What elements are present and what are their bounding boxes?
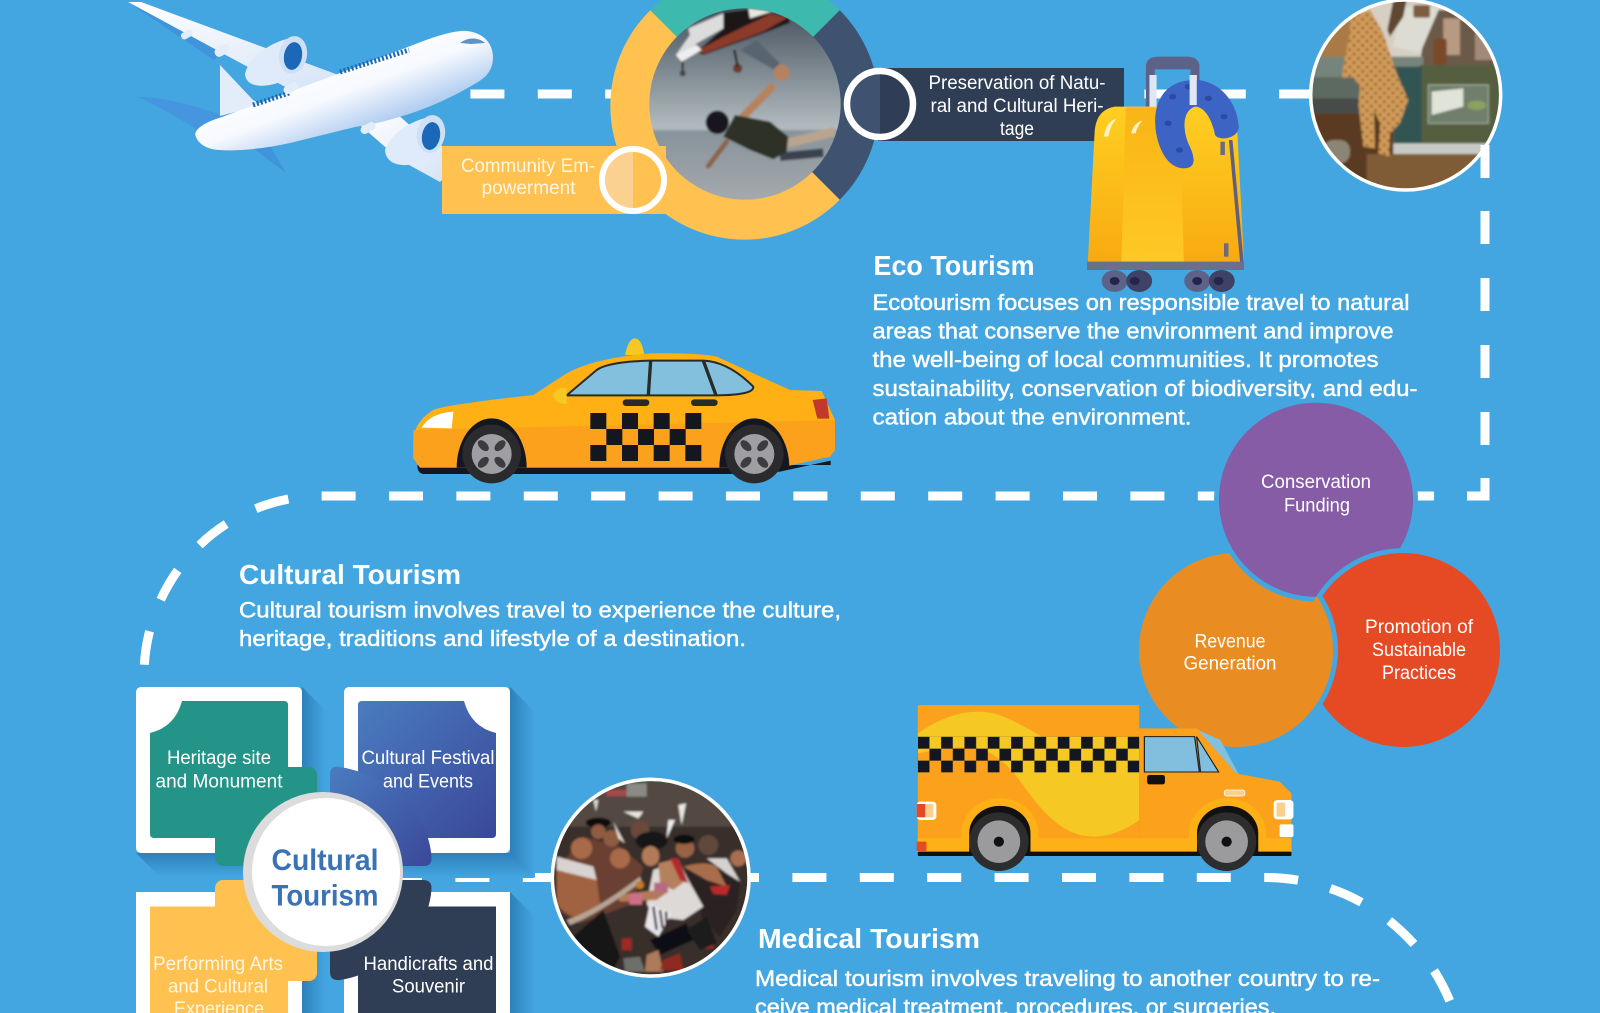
circle: promotion of sustainable practices bbox=[1306, 553, 1500, 747]
center circle: cultural tourism bbox=[243, 792, 403, 952]
heading: eco tourism: Eco Tourism bbox=[874, 250, 1034, 281]
photo: leopard on safari vehicle bbox=[1309, 0, 1503, 194]
heading: cultural tourism: Cultural Tourism bbox=[239, 559, 461, 590]
labels: benefits: Sustainable bbox=[1372, 640, 1466, 661]
callout: preservation of heritage: tage bbox=[1000, 119, 1034, 140]
card: heritage site and monument bbox=[136, 687, 317, 866]
text block: eco tourism description bbox=[872, 290, 1418, 429]
photo: skydiver under a plane bbox=[647, 7, 843, 203]
dashed route: right vertical segment bbox=[1467, 145, 1490, 500]
labels: benefits: Promotion of bbox=[1365, 617, 1474, 638]
text block: cultural tourism description: heritage, traditions and lifestyle of a destination. bbox=[239, 626, 746, 651]
dashed route: lower segment with right curve bbox=[388, 878, 1454, 1013]
text block: eco tourism description: sustainability, conservation of biodiversity, and edu- bbox=[872, 376, 1418, 401]
icon: taxi car bbox=[413, 338, 835, 483]
icon: airplane bbox=[128, 2, 493, 182]
card: performing arts and cultural experience bbox=[136, 880, 317, 1013]
dashed route: top segment bbox=[403, 90, 1310, 98]
card: cultural festival and events: Cultural Festival bbox=[362, 748, 494, 769]
circle: conservation funding bbox=[1219, 403, 1413, 597]
card: handicrafts and souvenir: Souvenir bbox=[392, 976, 466, 998]
donut segment: yellow bbox=[610, 10, 840, 240]
center circle: cultural tourism: Cultural bbox=[272, 844, 378, 877]
text block: eco tourism description: Ecotourism focuses on responsible travel to natural bbox=[872, 290, 1410, 315]
callout: preservation of heritage: Preservation of Natu- bbox=[928, 73, 1106, 94]
text block: eco tourism description: areas that conserve the environment and improve bbox=[872, 319, 1394, 344]
card: performing arts and cultural experience: and Cultural bbox=[168, 976, 268, 998]
icon: suitcase with neck pillow bbox=[1087, 57, 1244, 292]
center circle: cultural tourism: Tourism bbox=[272, 880, 378, 912]
text block: eco tourism description: cation about the environment. bbox=[872, 404, 1192, 429]
dashed route: middle segment with left curve bbox=[144, 496, 1434, 676]
labels: benefits: Generation bbox=[1184, 654, 1276, 674]
text block: medical tourism description: Medical tourism involves traveling to another country to re- bbox=[755, 966, 1380, 991]
card: performing arts and cultural experience: Performing Arts bbox=[153, 954, 283, 975]
venn diagram: eco tourism benefits bbox=[1139, 403, 1500, 747]
circle: revenue generation bbox=[1139, 553, 1333, 747]
callout: community empowerment bbox=[442, 146, 666, 214]
overlap: purple over orange bbox=[1219, 403, 1413, 597]
callout: preservation of heritage bbox=[847, 68, 1124, 141]
text block: medical tourism description bbox=[755, 966, 1380, 1013]
card: cultural festival and events bbox=[330, 687, 510, 866]
text block: cultural tourism description bbox=[239, 598, 841, 651]
donut segment: teal bbox=[650, 0, 840, 105]
heading: medical tourism: Medical Tourism bbox=[758, 923, 980, 954]
card shadows bbox=[136, 687, 535, 1013]
icon: taxi van bbox=[917, 705, 1293, 871]
card: handicrafts and souvenir bbox=[330, 880, 510, 1013]
labels: benefits: Revenue bbox=[1194, 632, 1266, 652]
card: handicrafts and souvenir: Handicrafts and bbox=[364, 954, 494, 975]
diagram: cultural tourism components bbox=[136, 687, 535, 1013]
callout: preservation of heritage: ral and Cultural Heri- bbox=[930, 96, 1104, 117]
card: heritage site and monument: and Monument bbox=[156, 772, 283, 792]
text block: cultural tourism description: Cultural tourism involves travel to experience the culture, bbox=[239, 598, 841, 622]
card: cultural festival and events: and Events bbox=[383, 772, 473, 792]
callout: community empowerment: powerment bbox=[482, 178, 576, 199]
labels: benefits: Conservation bbox=[1261, 472, 1371, 493]
callout: community empowerment: Community Em- bbox=[461, 156, 595, 177]
labels: benefits bbox=[1184, 472, 1474, 684]
donut chart: tourism pillars bbox=[442, 0, 1124, 240]
text block: eco tourism description: the well-being of local communities. It promotes bbox=[872, 347, 1378, 372]
labels: benefits: Funding bbox=[1284, 496, 1350, 516]
labels: benefits: Practices bbox=[1382, 663, 1456, 684]
donut segment: navy bbox=[745, 10, 879, 200]
photo: tribal dancers pulling a rope bbox=[550, 777, 753, 980]
card: heritage site and monument: Heritage site bbox=[167, 748, 271, 769]
